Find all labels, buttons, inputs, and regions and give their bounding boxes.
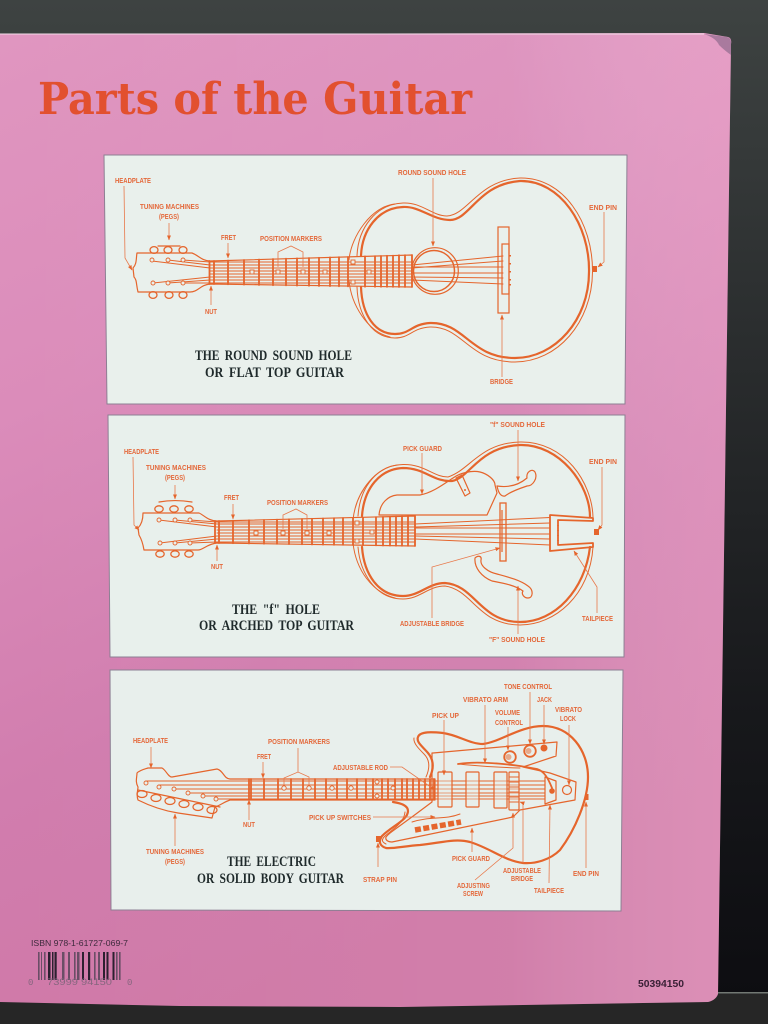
callout: headplate: HEADPLATE: [133, 738, 168, 745]
callout: position markers: POSITION MARKERS: [268, 739, 330, 746]
callout: bridge: [490, 315, 513, 386]
callout: adjustable rod: [333, 765, 435, 790]
callout: round sound hole: [398, 170, 466, 246]
guitar name: [195, 348, 352, 381]
callout: end pin: END PIN: [589, 459, 617, 466]
callout: vibrato arm: VIBRATO ARM: [463, 697, 508, 704]
callout: end pin: [589, 459, 617, 530]
callout: vibrato lock: [555, 707, 582, 785]
callout: adjusting screw: [457, 813, 513, 898]
callout: jack: [537, 697, 552, 744]
guitar drawing: flat top: [133, 178, 597, 362]
callout: pick up switches: [309, 815, 435, 822]
callout: tuning machines: (PEGS): [159, 214, 179, 221]
callout: headplate: [115, 178, 151, 270]
callout: f sound hole top: "f" SOUND HOLE: [490, 422, 545, 429]
guitar name: OR SOLID BODY GUITAR: [197, 871, 344, 887]
panel card: [104, 155, 627, 404]
callout: pick up switches: PICK UP SWITCHES: [309, 815, 371, 822]
callout: tailpiece: TAILPIECE: [534, 888, 564, 895]
callout: strap pin: [363, 843, 397, 884]
callout: adjustable bridge: [400, 548, 500, 628]
callout: f sound hole top: [490, 422, 545, 481]
callout: vibrato lock: VIBRATO: [555, 707, 582, 714]
callout: fret: [257, 754, 272, 778]
guitar name: [199, 602, 354, 634]
callout: position markers: [268, 739, 330, 785]
callout: fret: [224, 495, 240, 519]
callout: vibrato arm: [463, 697, 508, 763]
callout: end pin: [573, 802, 599, 878]
callout: f sound hole bottom: "F" SOUND HOLE: [489, 637, 545, 644]
callout: nut: NUT: [211, 564, 224, 571]
guitar name: THE ELECTRIC: [227, 854, 316, 870]
callout: adjusting screw: ADJUSTING: [457, 883, 490, 890]
panel: f hole guitar: [108, 415, 625, 657]
callout: tailpiece: [534, 805, 564, 895]
callout: tuning machines: (PEGS): [165, 859, 185, 866]
callout: tuning machines: [146, 465, 206, 499]
catalog number: 50394150: [638, 979, 684, 990]
callout: fret: [221, 235, 237, 258]
ISBN text: ISBN 978-1-61727-069-7: [31, 939, 129, 948]
callout: position markers: POSITION MARKERS: [267, 500, 328, 507]
panel card: [110, 670, 623, 911]
callout: tailpiece: TAILPIECE: [582, 616, 613, 623]
callout: nut: [211, 545, 224, 571]
title: Parts of the Guitar: [38, 74, 473, 125]
callout: tuning machines: [146, 814, 204, 866]
callout: volume control: CONTROL: [495, 720, 524, 727]
guitar name: OR ARCHED TOP GUITAR: [199, 618, 354, 634]
callout: adjustable rod: ADJUSTABLE ROD: [333, 765, 388, 772]
callout: position markers: [267, 500, 328, 529]
callout: nut: NUT: [243, 822, 256, 829]
callout: pick up: [432, 713, 459, 775]
callout: adjustable bridge: BRIDGE: [511, 876, 533, 883]
guitar name: OR FLAT TOP GUITAR: [205, 365, 344, 381]
callout: pick up: PICK UP: [432, 713, 459, 720]
callout: headplate: [133, 738, 168, 768]
callout: bridge: BRIDGE: [490, 379, 513, 386]
callout: tone control: [504, 684, 553, 744]
callout: adjustable bridge: ADJUSTABLE BRIDGE: [400, 621, 464, 628]
guitar name: THE ROUND SOUND HOLE: [195, 348, 352, 364]
callout: tuning machines: TUNING MACHINES: [146, 465, 206, 472]
panel: round sound hole guitar: [104, 155, 627, 404]
guitar name: THE "f" HOLE: [232, 602, 320, 618]
callout: tuning machines: TUNING MACHINES: [146, 849, 204, 856]
callout: end pin: END PIN: [589, 205, 617, 212]
callout: strap pin: STRAP PIN: [363, 877, 397, 884]
callout: fret: FRET: [221, 235, 237, 242]
callout: pick guard: [403, 446, 442, 494]
callout: headplate: HEADPLATE: [124, 449, 159, 456]
barcode: 0: [28, 978, 33, 988]
callout: fret: FRET: [224, 495, 240, 502]
callout: f sound hole bottom: [489, 586, 545, 644]
callout: tuning machines: TUNING MACHINES: [140, 204, 199, 211]
callout: pick guard: [452, 828, 490, 863]
callout: vibrato lock: LOCK: [560, 716, 576, 723]
callout: end pin: END PIN: [573, 871, 599, 878]
callout: tuning machines: (PEGS): [165, 475, 185, 482]
callout: adjusting screw: SCREW: [463, 891, 483, 898]
callout: position markers: [260, 236, 322, 267]
callout: position markers: POSITION MARKERS: [260, 236, 322, 243]
guitar drawing: solid body: [136, 726, 589, 863]
callout: nut: [205, 286, 218, 316]
guitar name: [197, 854, 344, 887]
callout: round sound hole: ROUND SOUND HOLE: [398, 170, 466, 177]
barcode: 73999 94150: [47, 977, 112, 987]
callout: tailpiece: [574, 551, 613, 623]
callout: jack: JACK: [537, 697, 552, 704]
callout: nut: [243, 800, 256, 829]
callout: adjustable bridge: [503, 802, 541, 883]
callout: tuning machines: [140, 204, 199, 240]
barcode: 0: [127, 978, 132, 988]
callout: fret: FRET: [257, 754, 272, 761]
panel card: [108, 415, 625, 657]
callout: end pin: [589, 205, 617, 267]
callout: headplate: [124, 449, 159, 530]
callout: volume control: VOLUME: [495, 710, 520, 717]
callout: volume control: [495, 710, 524, 750]
callout: adjustable bridge: ADJUSTABLE: [503, 868, 541, 875]
callout: nut: NUT: [205, 309, 218, 316]
barcode: [28, 952, 132, 988]
guitar drawing: arched top: [138, 442, 599, 625]
callout: tone control: TONE CONTROL: [504, 684, 553, 691]
callout: pick guard: PICK GUARD: [403, 446, 442, 453]
panel: electric guitar: [110, 670, 623, 911]
callout: pick guard: PICK GUARD: [452, 856, 490, 863]
callout: headplate: HEADPLATE: [115, 178, 151, 185]
